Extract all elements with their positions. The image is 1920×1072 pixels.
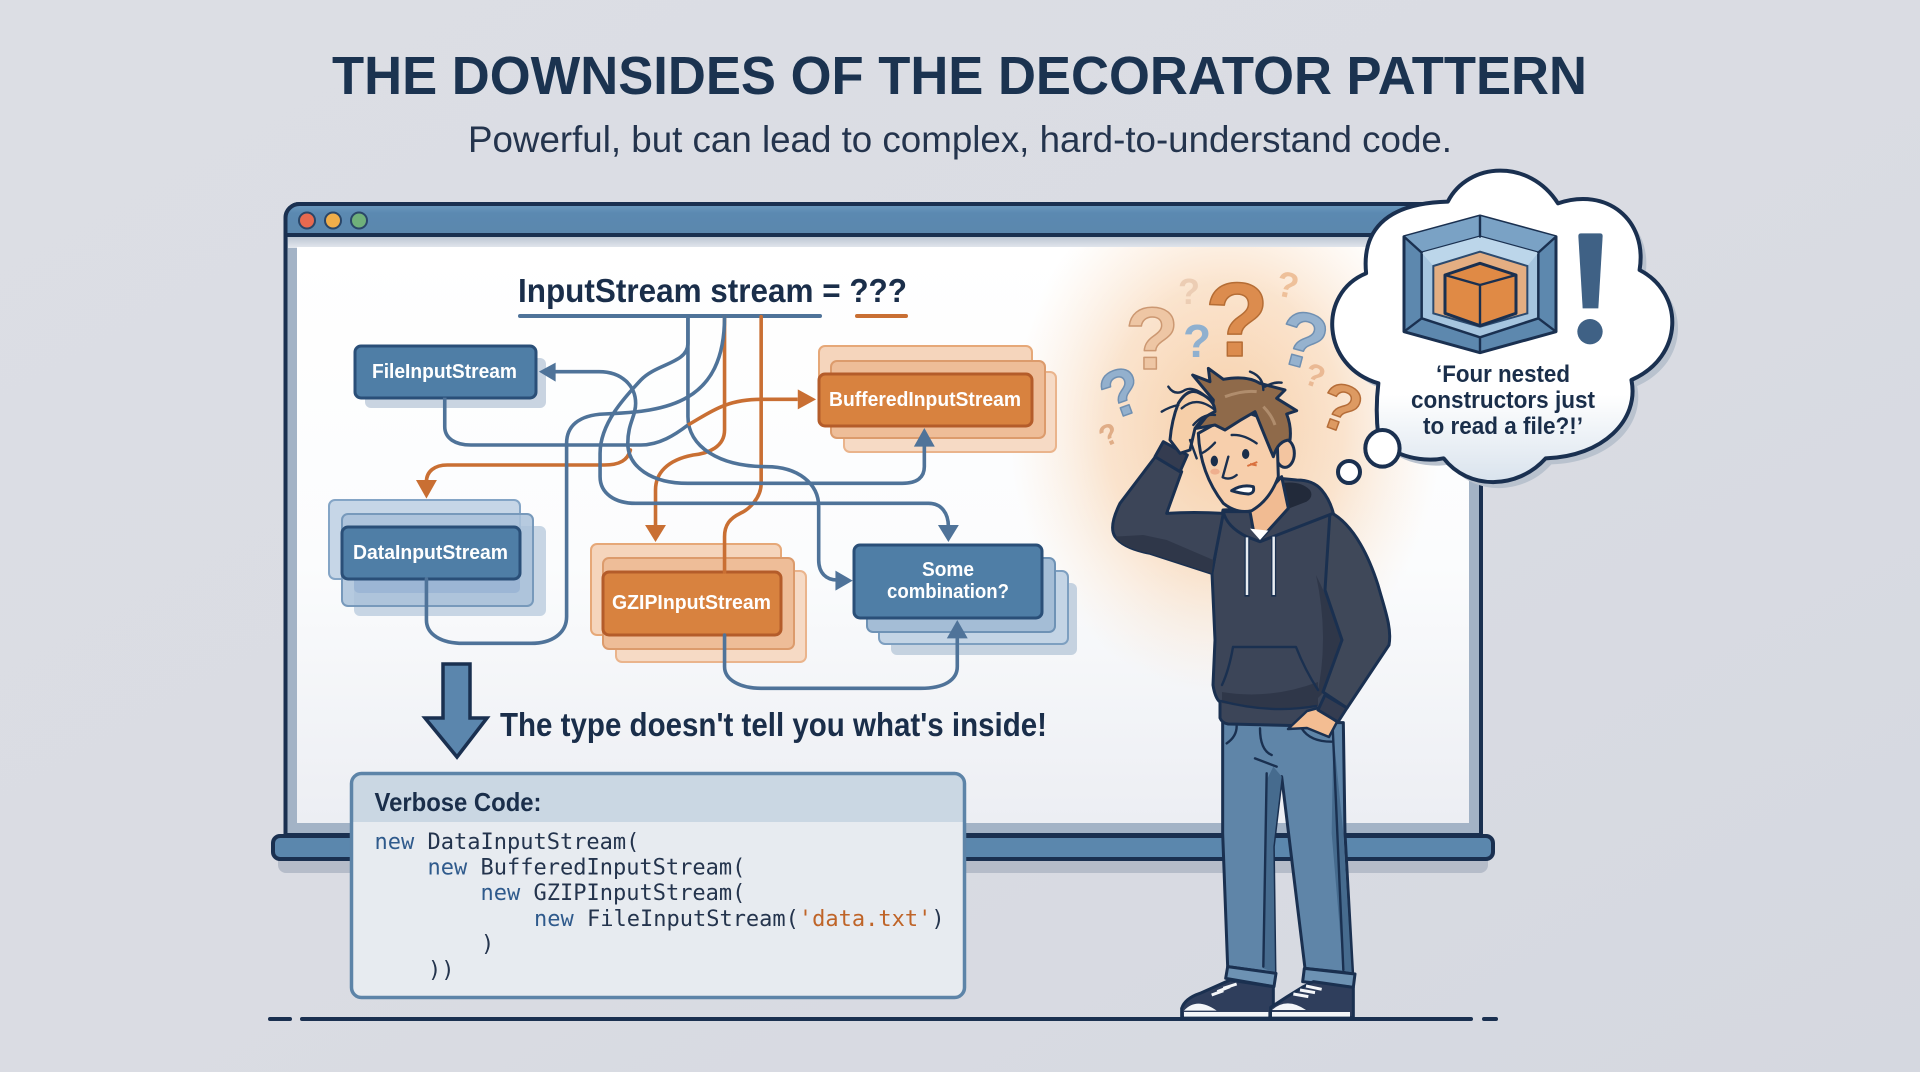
question marks: ? bbox=[1183, 315, 1211, 367]
code listing: )) bbox=[428, 958, 454, 983]
orange line to DataInputStream bbox=[416, 450, 630, 499]
ear bbox=[1276, 439, 1294, 467]
monitor base bar bbox=[273, 836, 1493, 859]
neck bbox=[1250, 477, 1288, 539]
question marks: ? bbox=[1269, 291, 1337, 389]
title: THE DOWNSIDES OF THE DECORATOR PATTERN bbox=[332, 46, 1587, 106]
arm shading bbox=[1115, 535, 1213, 573]
question marks: ? bbox=[1090, 351, 1153, 434]
blue line from FileInputStream bottom to orange arrow bbox=[445, 389, 816, 445]
thought text: to read a file?!’ bbox=[1423, 413, 1583, 440]
blue line from GZIP to Some combination bottom bbox=[725, 620, 968, 688]
question marks: ? bbox=[1309, 366, 1372, 449]
thought bubble bbox=[1332, 171, 1678, 488]
question marks: ? bbox=[1178, 271, 1200, 312]
blue line from DataInputStream up bbox=[426, 317, 725, 643]
code listing: new GZIPInputStream( bbox=[480, 881, 745, 906]
code listing: new BufferedInputStream( bbox=[428, 856, 745, 880]
hand in pocket and cuff bbox=[1288, 695, 1347, 737]
large tail circle bbox=[1365, 430, 1400, 467]
face bbox=[1198, 410, 1278, 511]
ground line bbox=[268, 1017, 1498, 1021]
blue line to Some combination top bbox=[600, 317, 959, 542]
legs and jeans bbox=[1182, 723, 1355, 1017]
hood drawstrings bbox=[1247, 537, 1274, 597]
thought text: ‘Four nested bbox=[1436, 361, 1570, 388]
code listing: new DataInputStream( bbox=[374, 830, 639, 855]
hair bbox=[1193, 368, 1297, 457]
question marks: ? bbox=[1273, 262, 1303, 307]
question marks: ? bbox=[1094, 417, 1124, 454]
t-shirt collar bbox=[1250, 529, 1268, 540]
box: Some combination? stack: Some bbox=[922, 559, 974, 581]
callout: type does not tell: The type doesn't tell you what's inside! bbox=[500, 706, 1047, 743]
thought text: constructors just bbox=[1411, 387, 1595, 414]
box: DataInputStream stack bbox=[329, 500, 546, 616]
box: FileInputStream bbox=[355, 346, 546, 408]
hair strands bbox=[1225, 372, 1282, 425]
small tail circle bbox=[1338, 461, 1360, 483]
nested cube icon and exclamation bbox=[1404, 216, 1603, 353]
blue line from FileInputStream to BufferedInputStream bbox=[539, 363, 935, 483]
thought text bbox=[1411, 361, 1595, 440]
hand on head bbox=[1170, 391, 1215, 453]
box: GZIPInputStream stack: GZIPInputStream bbox=[612, 592, 771, 614]
tangled connector arrows bbox=[416, 317, 968, 688]
question marks: ? bbox=[1299, 355, 1330, 396]
box: BufferedInputStream stack: BufferedInputStream bbox=[829, 389, 1021, 411]
box: FileInputStream: FileInputStream bbox=[372, 361, 517, 383]
hood inner shadow bbox=[1280, 482, 1311, 510]
box: Some combination? stack bbox=[854, 545, 1077, 655]
head and raised arm bbox=[1113, 368, 1333, 597]
code listing bbox=[374, 830, 945, 983]
exclamation mark bbox=[1577, 233, 1603, 344]
cloud shape bbox=[1332, 171, 1672, 482]
code listing: new FileInputStream('data.txt') bbox=[534, 907, 945, 932]
question marks: ? bbox=[1125, 289, 1179, 388]
box: DataInputStream stack: DataInputStream bbox=[353, 542, 508, 564]
trouser cuffs bbox=[1226, 967, 1276, 987]
big down arrow bbox=[425, 664, 487, 757]
box: Some combination? stack: combination? bbox=[887, 581, 1009, 603]
right arm and sleeve bbox=[1323, 512, 1390, 708]
orange line to GZIP bbox=[645, 317, 725, 542]
hoodie torso bbox=[1212, 505, 1346, 726]
panel: verbose code bbox=[352, 774, 964, 998]
orange stress glow bbox=[1034, 247, 1414, 664]
box: BufferedInputStream stack bbox=[819, 346, 1056, 452]
hoodie pocket bbox=[1221, 647, 1318, 709]
infographic scene bbox=[268, 56, 1678, 1021]
code listing: ) bbox=[481, 932, 494, 957]
question marks: ? bbox=[1205, 262, 1269, 379]
window title bar bbox=[286, 204, 1481, 235]
nested cube bbox=[1404, 216, 1556, 353]
code panel heading: Verbose Code: bbox=[374, 787, 542, 817]
box: GZIPInputStream stack bbox=[591, 544, 806, 662]
monitor window bbox=[273, 204, 1493, 873]
hood bbox=[1223, 478, 1333, 542]
subtitle: Powerful, but can lead to complex, hard-to-understand code. bbox=[468, 119, 1452, 160]
left shoe bbox=[1182, 980, 1273, 1017]
right shoe bbox=[1271, 982, 1353, 1017]
code heading: InputStream stream = ???: InputStream stream = ??? bbox=[518, 272, 907, 309]
question marks bbox=[1090, 262, 1372, 454]
fingers bbox=[1162, 387, 1215, 458]
arm cuff bbox=[1155, 442, 1187, 472]
facial features bbox=[1202, 435, 1257, 494]
person bbox=[1113, 368, 1390, 1017]
orange line from GZIP to top bbox=[725, 317, 761, 572]
cloud shadow bbox=[1338, 177, 1678, 488]
window control dots bbox=[299, 212, 367, 228]
raised arm bbox=[1113, 455, 1223, 573]
blue line to Some combination left side bbox=[688, 317, 853, 591]
